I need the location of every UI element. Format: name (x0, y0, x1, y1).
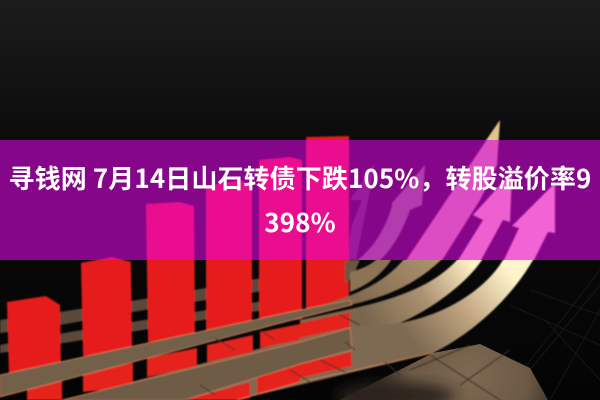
title line 2: 398% (264, 203, 336, 240)
pink arrow E (349, 165, 374, 260)
reflections of bars (27, 312, 352, 400)
banner overlaid arrows (349, 140, 556, 260)
faint arrow E (345, 260, 360, 283)
arrow A (300, 120, 500, 318)
floor grid (500, 270, 600, 400)
floor beam 2 (62, 328, 352, 400)
scene (0, 120, 555, 400)
bars (7, 136, 349, 376)
pink arrow D (355, 165, 425, 262)
title line 1: 寻钱网 7月14日山石转债下跌105%，转股溢价率9 (9, 159, 591, 196)
pink arrow C (503, 183, 555, 262)
pink arrow A (406, 140, 500, 260)
tile joints (200, 315, 510, 400)
floor beam 1 (0, 300, 352, 397)
rear tracks (0, 275, 300, 353)
arrow C and floor surface (62, 183, 555, 400)
faint arrow D (350, 165, 425, 292)
lit floor tiles (340, 344, 548, 400)
title (9, 159, 591, 240)
floor beam 3 (237, 353, 433, 400)
banner fill (0, 140, 600, 260)
arrow B (300, 172, 512, 338)
pink arrow B (457, 172, 512, 262)
banner overlaid bars (92, 140, 350, 260)
purple banner (0, 140, 600, 260)
shadow on floor (335, 383, 455, 400)
